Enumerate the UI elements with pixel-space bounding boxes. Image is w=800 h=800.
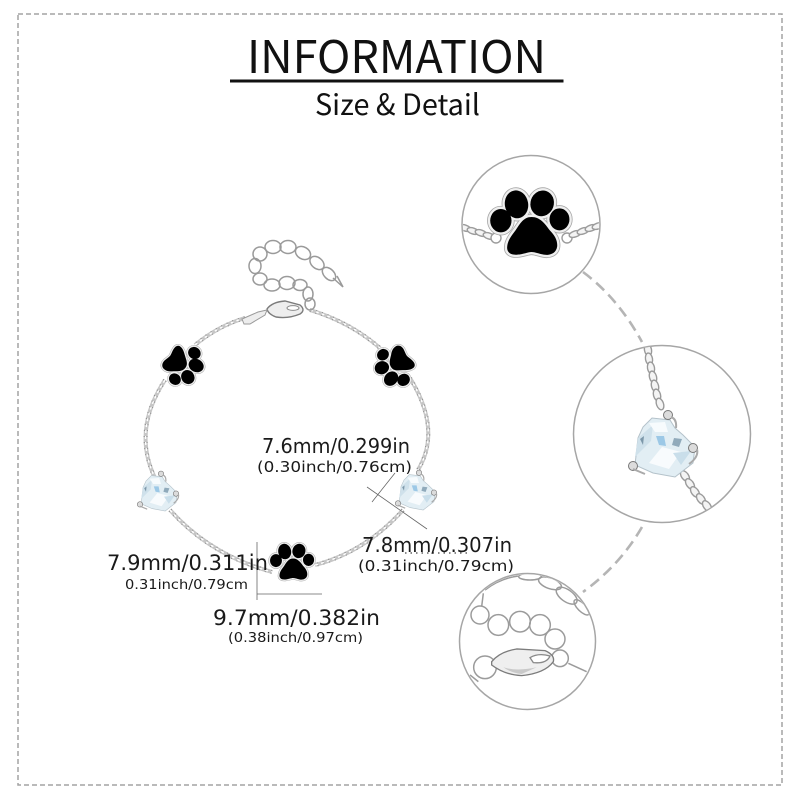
title block	[230, 21, 564, 124]
measurement guide lines	[257, 473, 470, 600]
dashed connector: heart to clasp	[583, 527, 642, 592]
measurement: stone height 7.8mm: (0.31inch/0.79cm)	[358, 557, 514, 575]
extender links	[470, 573, 592, 682]
heart stone: left	[137, 471, 179, 511]
measurement: paw width 9.7mm: (0.38inch/0.97cm)	[228, 630, 363, 646]
measurement: stone width 7.6mm: (0.30inch/0.76cm)	[257, 458, 412, 476]
detail circle: clasp and extender	[460, 573, 596, 710]
lobster clasp	[242, 301, 303, 324]
heading: INFORMATION: INFORMATION	[247, 21, 546, 86]
paw charm: upper left	[156, 337, 213, 394]
dashed connector: paw to heart	[583, 272, 642, 342]
lobster body	[492, 649, 554, 676]
measurement: stone width 7.6mm	[257, 434, 412, 476]
detail circle: heart stone	[574, 343, 750, 522]
measurement: stone height 7.8mm	[358, 533, 514, 575]
bracelet illustration	[137, 240, 437, 580]
measurement: stone width 7.6mm: 7.6mm/0.299in	[262, 434, 410, 458]
measurement: paw height 7.9mm: 7.9mm/0.311in	[107, 551, 268, 576]
measurement: stone height 7.8mm: 7.8mm/0.307in	[362, 533, 512, 557]
heading underline	[230, 80, 564, 82]
measurement: paw height 7.9mm	[107, 551, 268, 593]
detail circle: paw charm	[458, 156, 605, 294]
subheading: Size & Detail: Size & Detail	[315, 82, 480, 124]
measurement: paw height 7.9mm: 0.31inch/0.79cm	[125, 577, 248, 593]
heart stone: right	[395, 470, 437, 510]
measurement: paw width 9.7mm: 9.7mm/0.382in	[213, 606, 380, 631]
paw charm: upper right	[366, 338, 422, 396]
measurement: paw width 9.7mm	[213, 606, 380, 646]
extender chain	[249, 240, 343, 310]
chain	[146, 310, 428, 572]
paw charm: bottom	[270, 542, 314, 580]
